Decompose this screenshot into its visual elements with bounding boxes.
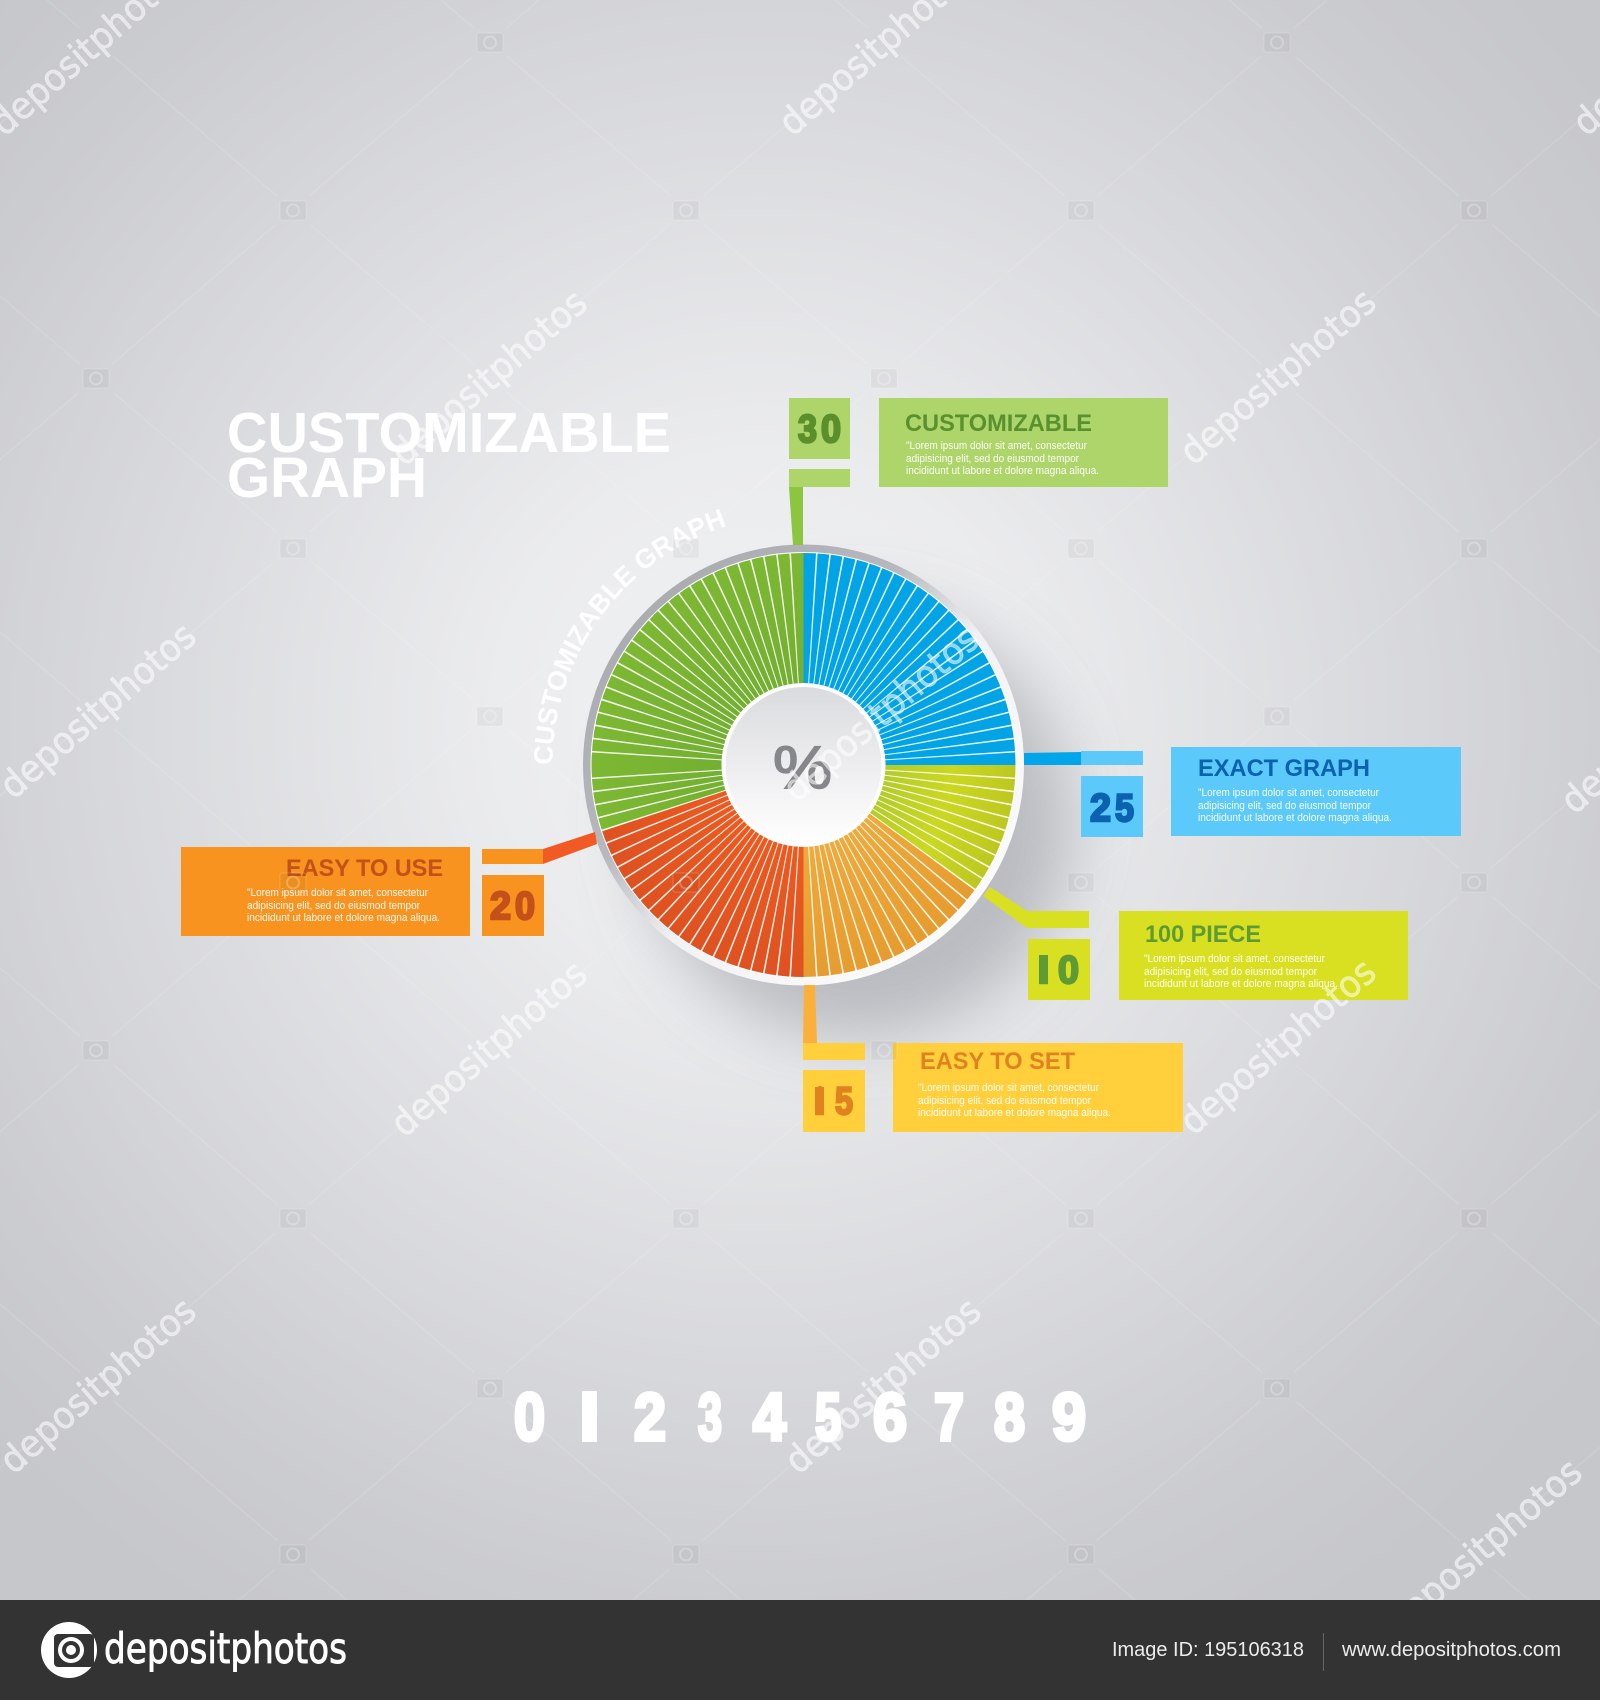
segment: lime 10	[804, 765, 1016, 890]
numeral sample row: 5	[815, 1380, 841, 1455]
heading: CUSTOMIZABLE	[905, 411, 1092, 437]
curved caption around the chart: CUSTOMIZABLE GRAPH	[534, 509, 726, 764]
body copy: adipisicing elit, sed do eiusmod tempor	[1198, 800, 1371, 812]
body copy: "Lorem ipsum dolor sit amet, consectetur	[247, 887, 428, 899]
number: 5	[835, 1080, 853, 1123]
body copy: adipisicing elit, sed do eiusmod tempor	[918, 1095, 1091, 1107]
body copy: "Lorem ipsum dolor sit amet, consectetur	[1198, 787, 1379, 799]
number	[1090, 787, 1134, 830]
number: 0	[515, 885, 535, 928]
body copy: incididunt ut labore et dolore magna aliqua.	[1144, 978, 1338, 990]
heading: EASY TO SET	[920, 1049, 1076, 1075]
body copy: incididunt ut labore et dolore magna aliqua.	[247, 912, 440, 924]
numeral sample row: 2	[634, 1380, 666, 1455]
numeral sample row: 4	[753, 1380, 786, 1455]
heading: EXACT GRAPH	[1198, 756, 1370, 782]
number: 2	[1090, 787, 1111, 830]
body copy: "Lorem ipsum dolor sit amet, consectetur	[906, 440, 1087, 452]
chart drop shadow	[639, 606, 1071, 1038]
body copy	[1198, 787, 1392, 824]
connector	[1024, 752, 1081, 765]
body copy	[1144, 953, 1338, 990]
numeral sample row: 1	[585, 1380, 594, 1455]
body copy: incididunt ut labore et dolore magna aliqua.	[906, 465, 1099, 477]
text box	[1119, 911, 1408, 1000]
logo wordmark: depositphotos	[104, 1624, 347, 1673]
watermark text: depositphotos	[382, 952, 595, 1145]
title	[227, 401, 671, 510]
body copy: incididunt ut labore et dolore magna aliqua.	[1198, 812, 1392, 824]
website: www.depositphotos.com	[1341, 1639, 1561, 1661]
number	[798, 408, 841, 451]
text box	[181, 847, 470, 936]
watermark text: depositphotos	[774, 617, 987, 810]
numeral sample row: 6	[873, 1380, 907, 1455]
segment: green 30	[592, 553, 804, 830]
heading: 100 PIECE	[1145, 922, 1261, 948]
number: 1	[815, 1080, 824, 1123]
number: 0	[1058, 949, 1079, 992]
number: 0	[821, 408, 841, 451]
body copy: adipisicing elit, sed do eiusmod tempor	[247, 900, 420, 912]
segment: red 20	[602, 765, 804, 977]
numeral sample row: 7	[934, 1380, 964, 1455]
watermark text: depositphotos	[382, 281, 595, 474]
number tile	[482, 875, 544, 936]
hub rim	[722, 683, 886, 847]
number: 1	[1039, 949, 1048, 992]
text box	[893, 1043, 1183, 1132]
number	[490, 885, 535, 928]
numeral sample row: 3	[698, 1380, 722, 1455]
image id: Image ID: 195106318	[1112, 1639, 1304, 1661]
connector	[803, 985, 817, 1043]
watermark camera icons	[83, 33, 1487, 1564]
number: 2	[490, 885, 511, 928]
watermark text: depositphotos	[776, 1289, 989, 1482]
icon: camera logo	[41, 1622, 97, 1678]
watermark text: depositphotos	[1171, 280, 1384, 473]
title: GRAPH	[227, 446, 427, 510]
panel: exact graph 25	[1024, 747, 1461, 837]
body copy: "Lorem ipsum dolor sit amet, consectetur	[1144, 953, 1325, 965]
title: CUSTOMIZABLE	[227, 401, 671, 465]
number: 5	[1115, 787, 1134, 830]
numeral sample row: 9	[1052, 1380, 1086, 1455]
body copy: incididunt ut labore et dolore magna aliqua.	[918, 1107, 1111, 1119]
watermark text: depositphotos	[1377, 1450, 1590, 1643]
footer divider	[1323, 1633, 1324, 1671]
donut chart	[583, 544, 1024, 986]
percent tick lines	[591, 552, 1016, 978]
panel: easy to use 20	[181, 832, 597, 936]
hub face	[726, 687, 882, 843]
number: 3	[798, 408, 817, 451]
panel: customizable 30	[789, 398, 1168, 545]
body copy	[247, 887, 440, 924]
numeral sample row	[514, 1380, 1086, 1455]
ring inner backing	[590, 552, 1016, 978]
flag bar	[789, 469, 850, 487]
body copy	[918, 1082, 1111, 1119]
text box	[1171, 747, 1461, 836]
watermark text: depositphotos	[1171, 950, 1384, 1143]
heading: EASY TO USE	[286, 856, 443, 882]
outer ring	[583, 544, 1024, 986]
text box	[879, 398, 1168, 487]
panel: 100 piece 10	[983, 887, 1408, 1000]
number	[815, 1080, 853, 1123]
body copy: adipisicing elit, sed do eiusmod tempor	[906, 453, 1079, 465]
flag bar	[1081, 751, 1143, 765]
panel: easy to set 15	[803, 985, 1183, 1132]
flag bar	[803, 1043, 865, 1060]
connector	[789, 487, 803, 545]
segment: orange 15	[804, 765, 975, 977]
body copy: "Lorem ipsum dolor sit amet, consectetur	[918, 1082, 1099, 1094]
footer band	[0, 1600, 1600, 1700]
numeral sample row: 8	[994, 1380, 1025, 1455]
connector	[983, 887, 1089, 928]
connector	[543, 832, 597, 864]
number	[1039, 949, 1079, 992]
number tile	[1081, 776, 1143, 837]
number tile	[803, 1070, 865, 1132]
flag bar	[482, 849, 543, 864]
number tile	[1028, 939, 1090, 1000]
numeral sample row: 0	[514, 1380, 545, 1455]
percent symbol: %	[773, 734, 832, 801]
segment: blue 25	[804, 553, 1016, 765]
body copy	[906, 440, 1099, 477]
number tile	[789, 398, 850, 459]
body copy: adipisicing elit, sed do eiusmod tempor	[1144, 966, 1317, 978]
